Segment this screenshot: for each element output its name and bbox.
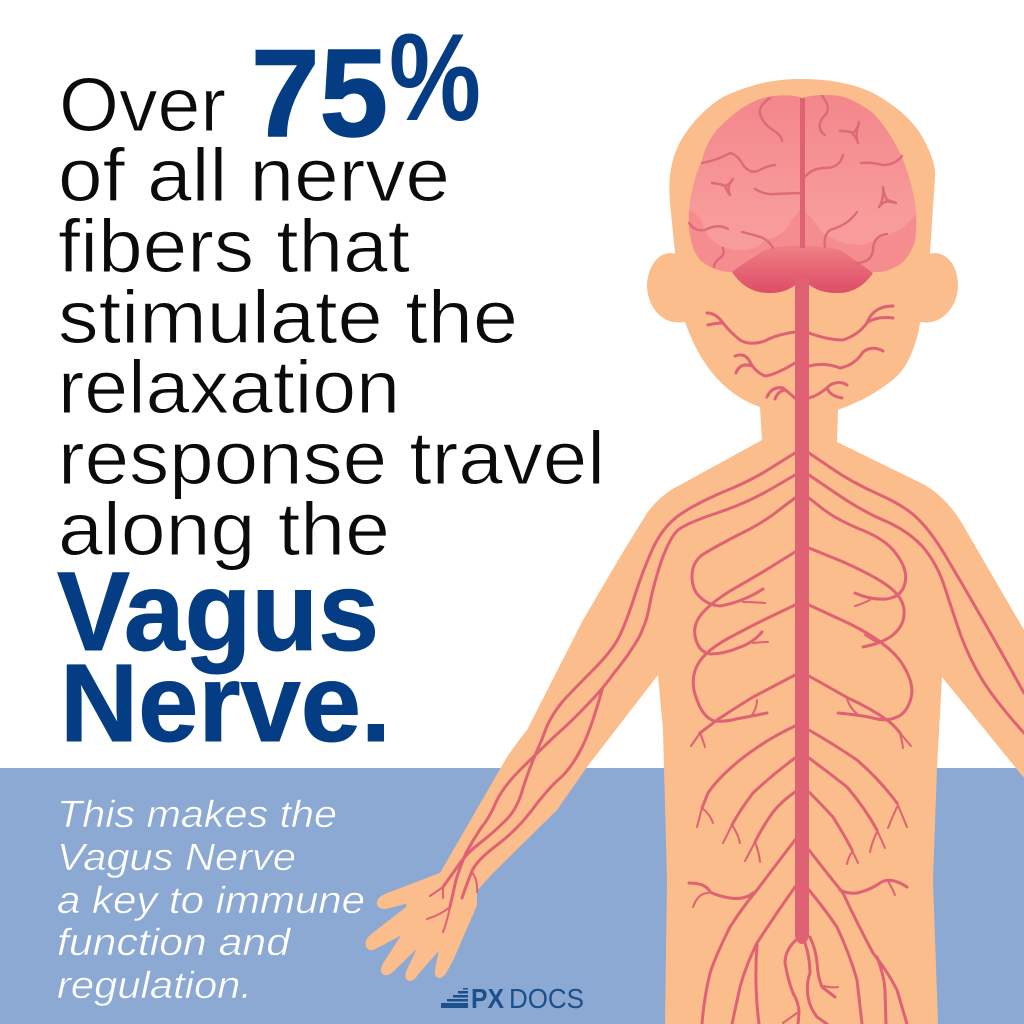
headline body text: along the xyxy=(58,487,390,571)
logo: PX DOCS xyxy=(441,983,584,1014)
human figure illustration xyxy=(368,79,1024,1024)
headline body text: stimulate the xyxy=(58,275,518,359)
left arm nerves xyxy=(427,453,795,932)
head nerves xyxy=(707,306,893,399)
headline body text: response travel xyxy=(58,416,605,500)
cerebellum xyxy=(732,246,873,293)
line: Over 75%: Over xyxy=(59,63,226,148)
headline body text: fibers that xyxy=(58,204,410,288)
emphasis: Vagus Nerve: Vagus xyxy=(57,549,379,674)
hand xyxy=(368,875,475,979)
headline body text xyxy=(58,133,605,571)
lower arcs right xyxy=(809,730,897,803)
spinal cord xyxy=(795,270,809,944)
subtext on blue band: Vagus Nerve xyxy=(57,837,296,879)
rib loops left xyxy=(692,498,795,606)
subtext on blue band xyxy=(57,794,365,1007)
logo: PX DOCS: PX xyxy=(471,983,504,1014)
brain creases xyxy=(689,96,902,267)
emphasis: Vagus Nerve xyxy=(57,549,391,765)
subtext on blue band: function and xyxy=(57,922,292,964)
line: Over 75%: 75 xyxy=(251,25,388,163)
icon: stair steps xyxy=(441,988,468,1008)
subtext on blue band: a key to immune xyxy=(57,880,365,922)
body silhouette xyxy=(368,79,1024,1024)
line: Over 75%: % xyxy=(389,9,481,147)
rib loops right xyxy=(809,498,906,599)
subtext on blue band: regulation. xyxy=(57,965,252,1007)
logo: PX DOCS: DOCS xyxy=(509,983,584,1014)
lower arcs left xyxy=(702,726,795,808)
brain xyxy=(689,95,916,293)
headline body text: of all nerve xyxy=(58,133,450,217)
emphasis: Vagus Nerve: Nerve. xyxy=(60,642,391,765)
brain midline xyxy=(800,98,805,248)
blue lower band xyxy=(0,768,1024,1024)
pelvic nerves xyxy=(702,840,795,1024)
headline xyxy=(57,9,605,765)
right arm nerves xyxy=(809,453,1024,693)
headline body text: relaxation xyxy=(58,345,400,429)
line: Over 75% xyxy=(59,9,481,163)
subtext on blue band: This makes the xyxy=(57,794,337,836)
torso and arm nerves xyxy=(427,453,1024,1024)
cauda nerves xyxy=(785,940,799,1024)
